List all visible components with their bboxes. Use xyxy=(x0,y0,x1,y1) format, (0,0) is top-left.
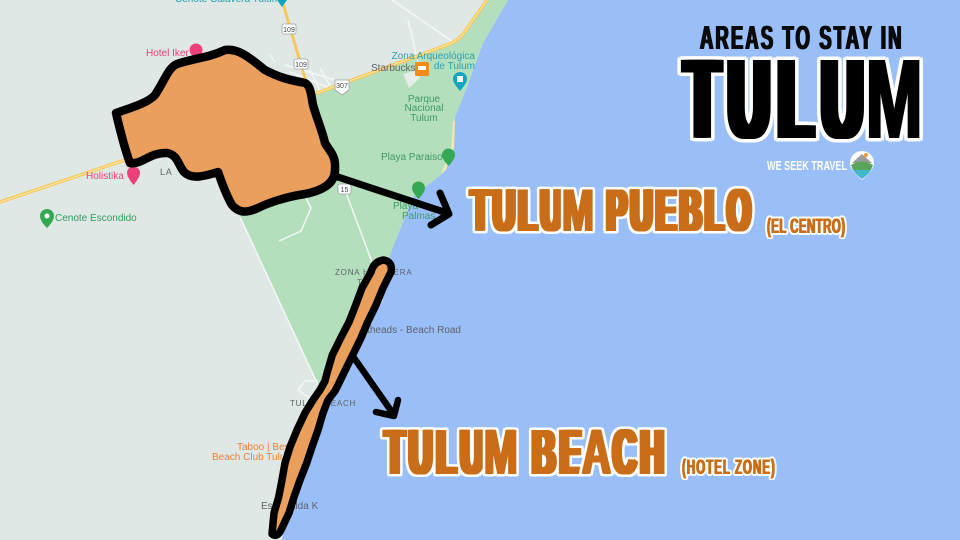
label: Tulum Pueblo: M xyxy=(562,177,598,244)
logo pin icon xyxy=(850,151,874,180)
highway 307 west centre xyxy=(0,160,125,202)
logo wordmark: WE SEEK TRAVEL xyxy=(767,158,847,173)
label: Zona Arqueologica de Tulum: Zona Arqueológica xyxy=(392,51,475,62)
label: Zona Arqueologica de Tulum: de Tulum xyxy=(434,61,475,72)
label: Parque Nacional Tulum: Tulum xyxy=(410,113,438,124)
highway 307 east xyxy=(317,0,487,93)
label: Hotel Iker: Hotel Iker xyxy=(146,48,189,59)
label: Holistika: Holistika xyxy=(86,171,124,182)
label: Zona Arqueologica de Tulum xyxy=(392,51,475,72)
label: Playa Palmas xyxy=(393,201,435,222)
title: Tulum: M xyxy=(866,36,933,162)
highway 307 west xyxy=(0,160,125,202)
yellow highways xyxy=(0,0,487,202)
label: Esmeralda K: Esmeralda K xyxy=(261,501,319,512)
pin: Playa Paraiso xyxy=(442,149,455,166)
arrow: to Tulum Beach xyxy=(352,355,398,416)
label: Taboo Beach Club: Beach Club Tulum xyxy=(212,452,294,463)
national park green area xyxy=(200,0,508,393)
road shield 109 upper: 109 xyxy=(283,27,295,34)
logo: We Seek Travel xyxy=(767,151,874,180)
pin: Cenote Escondido xyxy=(40,209,54,228)
white minor roads xyxy=(240,0,452,400)
label: Tulum under Zona Hotelera: TULUM xyxy=(357,278,389,287)
road shield 307: 307 xyxy=(336,83,348,90)
label: Parque Nacional Tulum: Nacional xyxy=(405,103,443,114)
title: Tulum: TULU xyxy=(685,36,871,162)
pin: Playa Palmas xyxy=(412,182,425,199)
pale plaza near Starbucks xyxy=(403,70,420,88)
label: Tulum Beach: A xyxy=(582,416,616,488)
top map pin xyxy=(277,0,287,7)
side road xyxy=(279,198,311,241)
heading: Areas to stay in: AREAS TO STAY IN xyxy=(700,20,903,57)
label: Zona Hotelera: ZONA HOTELERA xyxy=(335,268,413,277)
label: Taboo Beach Club xyxy=(212,442,294,463)
land xyxy=(0,0,510,540)
beach road xyxy=(298,381,318,400)
label: Playa Paraiso: Playa Paraiso xyxy=(381,152,443,163)
highway 307 east centre xyxy=(317,0,487,93)
water xyxy=(282,0,960,540)
road shield 109 upper xyxy=(282,24,296,34)
label: Parque Nacional Tulum: Parque xyxy=(408,94,441,105)
label: Tulum Beach: M xyxy=(484,416,522,488)
highway 109 xyxy=(282,0,306,82)
road shield 109 lower xyxy=(294,59,308,69)
label: Starbucks: Starbucks xyxy=(371,63,415,74)
road shield 15: 15 xyxy=(341,187,348,194)
label: Parque Nacional Tulum xyxy=(405,94,443,124)
label: Playa Palmas: Palmas xyxy=(402,211,435,222)
arrow: to Tulum Pueblo xyxy=(338,177,449,225)
pin: Hotel Iker xyxy=(190,44,202,56)
road shield 307 xyxy=(335,80,349,95)
town grid xyxy=(270,55,335,90)
label: Hotel Zone: (HOTEL ZONE) xyxy=(682,456,776,479)
north roads xyxy=(392,0,452,62)
label: Taboo Beach Club: Taboo | Best xyxy=(237,442,293,453)
label: Playa Palmas: Playa xyxy=(393,201,418,212)
label: El Centro: (EL CENTRO) xyxy=(767,215,845,238)
road shield 15 xyxy=(338,184,351,194)
highway 15 road xyxy=(345,190,372,262)
icon: Starbucks cup xyxy=(415,62,429,76)
pin: ruins xyxy=(453,72,467,91)
park boundary xyxy=(240,217,318,385)
label: LA: LA xyxy=(160,167,173,177)
label: Tulum Pueblo: TULU PUEBLO xyxy=(471,177,754,244)
label: Tulum Beach: TULU BE CH xyxy=(385,416,668,488)
area: Tulum Beach strip xyxy=(272,260,391,535)
label: Cenote Escondido: Cenote Escondido xyxy=(55,213,137,224)
pin: Holistika xyxy=(127,166,140,185)
label: Tulum Beach: TULUM BEACH xyxy=(290,399,356,408)
label: Beach Road: Parrotheads - Beach Road xyxy=(343,325,461,336)
sand strip xyxy=(441,120,455,174)
road shield 109 lower: 109 xyxy=(295,62,307,69)
area: Tulum Pueblo blob xyxy=(116,50,335,212)
